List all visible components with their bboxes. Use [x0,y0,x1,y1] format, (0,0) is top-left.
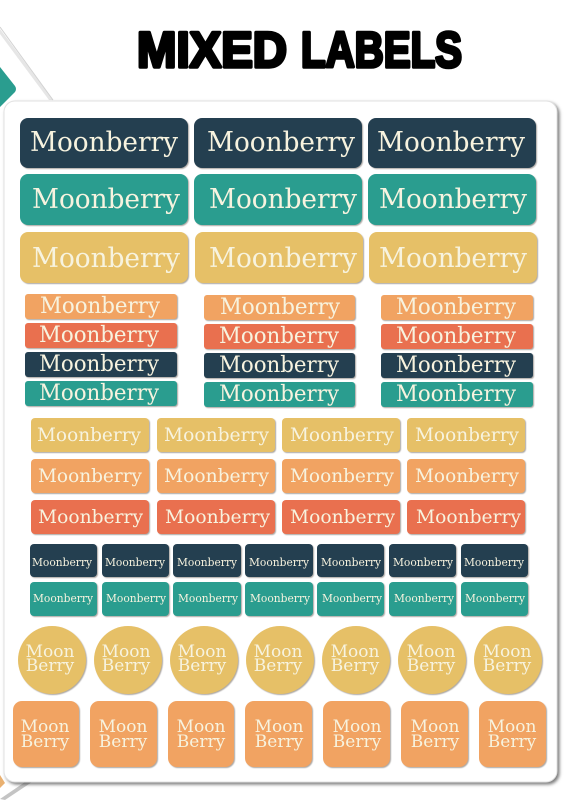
label: dark small 2: Moonberry [105,556,166,569]
label: yellow medium 4 [407,418,525,452]
label: dark large 3: Moonberry [377,127,526,158]
label: circle 7 [474,626,542,694]
label: teal small 5 [317,582,384,616]
label: orange medium 3: Moonberry [290,465,394,487]
label: circle 3: Berry [178,656,227,676]
title: MIXED [137,22,287,78]
label: circle 2 [94,626,162,694]
label: dark small 6 [389,544,456,577]
label: teal slim 2: Moonberry [219,382,340,407]
label: coral slim 3: Moonberry [396,324,517,349]
label: dark slim 3: Moonberry [396,353,517,378]
label: yellow medium 1: Moonberry [37,424,141,446]
label: teal large 1 [20,174,188,225]
label: yellow large 3 [369,232,537,283]
label: circle 4: Berry [254,656,303,676]
label: circle 7: Berry [483,656,532,676]
label: dark large 2: Moonberry [207,127,356,158]
label: yellow large 3: Moonberry [379,243,528,274]
label: square 4: Moon [255,717,303,737]
label: square 4 [245,701,312,767]
label: dark large 2 [194,118,362,168]
label: teal large 3: Moonberry [379,184,528,215]
label: circle 1: Moon [26,642,74,662]
group: large rectangular labels [20,118,537,283]
label: square 3: Berry [177,732,226,752]
label: dark small 4 [245,544,313,577]
label: yellow medium 4: Moonberry [415,424,519,446]
label: circle 3: Moon [178,642,226,662]
group: square labels [13,701,546,767]
label: square 5: Moon [333,717,381,737]
label: teal small 7: Moonberry [465,592,526,605]
label: yellow medium 1 [31,418,149,452]
label: orange slim 3: Moonberry [396,295,517,320]
label: yellow medium 3: Moonberry [290,424,394,446]
label: teal small 1 [30,582,97,616]
label: teal slim 3: Moonberry [396,382,517,407]
group: slim rectangular labels [25,294,533,407]
label: dark small 3: Moonberry [177,556,238,569]
label: teal slim 1: Moonberry [39,381,160,406]
label: yellow large 2: Moonberry [209,243,358,274]
label: yellow medium 2: Moonberry [164,424,269,446]
label: coral medium 2 [157,500,275,534]
label: circle 5: Moon [331,642,379,662]
label: dark large 1 [20,118,188,168]
label: coral slim 2: Moonberry [219,324,340,349]
background sheet corner: bottom-left [0,775,32,800]
label: square 2 [90,701,157,767]
label: coral slim 1: Moonberry [39,323,160,348]
label: teal large 2 [194,174,362,225]
title: LABELS [301,22,462,78]
background sheet corner: top-left diagonal [0,27,53,100]
label: dark small 1: Moonberry [32,556,93,569]
label: orange slim 2: Moonberry [220,295,341,320]
label: teal small 3: Moonberry [178,592,239,605]
label: square 6: Moon [411,717,459,737]
label: square 1: Berry [21,732,70,752]
label: teal large 2: Moonberry [209,184,358,215]
label: square 1 [13,701,79,767]
label: teal small 6 [389,582,456,616]
label: coral medium 1 [31,500,149,534]
label: dark slim 2: Moonberry [219,353,340,378]
label: yellow large 1: Moonberry [32,243,181,274]
label: square 5 [323,701,390,767]
label: coral medium 4 [407,500,525,534]
label: circle 1 [18,626,86,694]
label: circle 6: Berry [407,656,456,676]
label: circle 2: Moon [102,642,150,662]
label: yellow large 1 [20,232,188,283]
label: yellow medium 2 [157,418,275,452]
label: circle 3 [170,626,238,694]
label: circle 6 [398,626,466,694]
label: dark small 7 [461,544,528,577]
label: orange slim 1: Moonberry [40,294,161,319]
label: square 6 [401,701,468,767]
label: square 6: Berry [411,732,460,752]
label: orange medium 1 [31,459,149,493]
label: orange medium 2: Moonberry [164,465,269,487]
label: square 3: Moon [177,717,225,737]
icon: teal tab behind sheet [0,67,16,107]
label: teal small 4 [245,582,313,616]
label: dark large 3 [368,118,536,168]
label: dark slim 1: Moonberry [39,352,160,377]
label: dark large 1: Moonberry [30,127,179,158]
label: square 7: Berry [488,732,537,752]
label: circle 1: Berry [26,656,75,676]
label: orange medium 2 [157,459,275,493]
label: teal small 2 [102,582,169,616]
label: circle 7: Moon [483,642,531,662]
label: dark small 4: Moonberry [249,556,310,569]
label: dark small 1 [30,544,97,577]
label: teal small 4: Moonberry [250,592,311,605]
label: square 5: Berry [333,732,382,752]
label: teal small 7 [461,582,528,616]
label: coral medium 4: Moonberry [416,506,521,528]
label: coral medium 2: Moonberry [165,506,270,528]
label: coral medium 1: Moonberry [38,506,143,528]
label: yellow medium 3 [282,418,400,452]
label: coral medium 3 [282,500,400,534]
label: teal small 2: Moonberry [106,592,167,605]
group: round labels [18,626,542,694]
label: circle 5 [322,626,390,694]
label: teal small 5: Moonberry [322,592,383,605]
label: teal large 3 [368,174,536,225]
label: dark small 5 [317,544,384,577]
label: dark small 5: Moonberry [321,556,382,569]
label: coral medium 3: Moonberry [290,506,395,528]
label: teal small 3 [173,582,241,616]
group: medium rectangular labels [31,418,525,534]
label: dark small 3 [173,544,241,577]
label: orange medium 4: Moonberry [415,465,519,487]
label: square 7 [479,701,546,767]
label: square 7: Moon [488,717,536,737]
label: teal large 1: Moonberry [32,184,181,215]
title [137,22,462,78]
label: square 2: Moon [99,717,147,737]
label: circle 2: Berry [102,656,151,676]
label: square 4: Berry [255,732,304,752]
label: orange medium 1: Moonberry [38,465,142,487]
label: square 3 [168,701,234,767]
label: square 1: Moon [21,717,69,737]
label: yellow large 2 [195,232,363,283]
label: circle 4 [246,626,314,694]
label: circle 4: Moon [254,642,302,662]
label: dark small 7: Moonberry [464,556,525,569]
group: small rectangular labels [30,544,528,616]
label: dark small 2 [102,544,169,577]
label: square 2: Berry [99,732,148,752]
label: orange medium 3 [282,459,400,493]
label: circle 5: Berry [331,656,380,676]
label: dark small 6: Moonberry [393,556,454,569]
label: orange medium 4 [407,459,525,493]
label: teal small 1: Moonberry [33,592,94,605]
label: teal small 6: Moonberry [394,592,455,605]
label: circle 6: Moon [407,642,455,662]
